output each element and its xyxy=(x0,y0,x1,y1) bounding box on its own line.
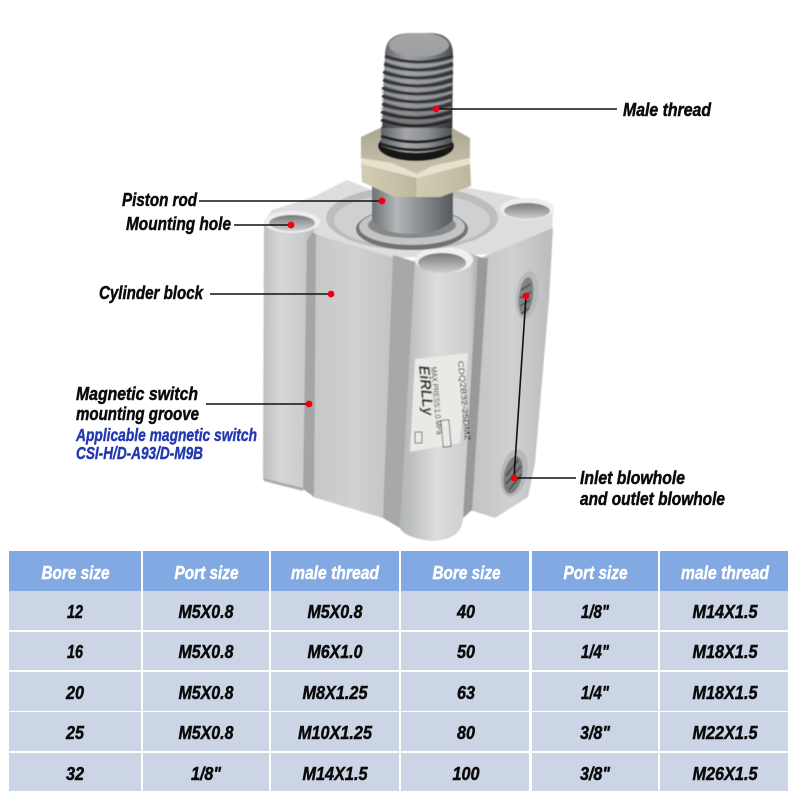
table row: 16 / 50: 16 xyxy=(67,641,84,662)
cylinder top face xyxy=(264,180,553,258)
table row: 16 / 50: M18X1.5 xyxy=(692,641,758,662)
specification table xyxy=(9,551,788,791)
table row: 32 / 100: M26X1.5 xyxy=(692,763,758,784)
callout: piston rod: Piston rod xyxy=(122,189,198,210)
nameplate label xyxy=(410,353,472,452)
table row: 16 / 50: 1/4" xyxy=(581,641,609,662)
table row: 25 / 80: M5X0.8 xyxy=(178,722,234,743)
callout: inlet and outlet blowhole: and outlet blowhole xyxy=(580,488,725,509)
table row: 12 / 40: M14X1.5 xyxy=(692,601,758,622)
table row: 25 / 80: 25 xyxy=(65,722,85,743)
groove left of right tube xyxy=(383,255,416,528)
callout: male thread: Male thread xyxy=(623,99,712,120)
table row: 16 / 50: M6X1.0 xyxy=(308,641,363,662)
inlet port: upper xyxy=(513,270,541,320)
table row: 32 / 100: M14X1.5 xyxy=(302,763,368,784)
table row: 32 / 100 xyxy=(9,753,788,791)
left tube xyxy=(263,214,320,488)
product photo: compact air cylinder xyxy=(263,33,554,541)
table row: 25 / 80: M22X1.5 xyxy=(692,722,758,743)
callout: male thread xyxy=(433,99,712,120)
table row: 16 / 50 xyxy=(9,632,788,670)
nameplate label: EiRLLy xyxy=(415,365,436,417)
table row: 12 / 40: 12 xyxy=(67,601,84,622)
table row: 25 / 80: 80 xyxy=(457,722,476,743)
table row: 20 / 63: M5X0.8 xyxy=(178,682,234,703)
table row: 20 / 63: M8X1.25 xyxy=(302,682,368,703)
applicable magnetic switch note: CSI-H/D-A93/D-M9B xyxy=(76,443,203,463)
callout: magnetic switch mounting groove xyxy=(76,383,312,424)
callout: cylinder block xyxy=(99,282,334,303)
piston seat rings xyxy=(326,186,498,250)
table header row: male thread xyxy=(291,562,380,583)
mounting hole: back right xyxy=(500,198,554,220)
callout: magnetic switch mounting groove: mounting groove xyxy=(76,403,199,424)
main front face xyxy=(313,234,395,518)
groove beside left tube xyxy=(303,228,316,497)
table row: 16 / 50: 50 xyxy=(457,641,476,662)
table row: 32 / 100: 1/8" xyxy=(191,763,221,784)
table row: 32 / 100: 100 xyxy=(452,763,480,784)
callout: inlet and outlet blowhole xyxy=(511,293,725,509)
table row: 20 / 63: 20 xyxy=(65,682,85,703)
table row: 25 / 80: 3/8" xyxy=(580,722,610,743)
male thread xyxy=(381,33,453,157)
table row: 25 / 80 xyxy=(9,712,788,751)
right tube xyxy=(400,249,482,541)
nameplate label: MAX PRESS:1.0 MPa xyxy=(429,366,444,435)
table row: 25 / 80: M10X1.25 xyxy=(298,722,373,743)
table row: 12 / 40: M5X0.8 xyxy=(308,601,363,622)
applicable magnetic switch note: Applicable magnetic switch xyxy=(75,425,257,445)
table row: 12 / 40 xyxy=(9,591,788,630)
table header row: Port size xyxy=(174,562,238,583)
table row: 20 / 63 xyxy=(9,672,788,711)
table header row: male thread xyxy=(681,562,770,583)
callout: inlet and outlet blowhole: Inlet blowhole xyxy=(580,467,685,488)
table header row xyxy=(9,551,788,591)
table row: 32 / 100: 3/8" xyxy=(580,763,610,784)
mounting hole: left xyxy=(264,211,320,233)
piston rod shaft xyxy=(372,185,453,234)
table header row: Bore size xyxy=(42,562,110,583)
applicable magnetic switch note xyxy=(75,425,257,463)
outlet port: lower xyxy=(496,447,532,499)
table row: 16 / 50: M5X0.8 xyxy=(178,641,234,662)
right side face xyxy=(470,228,553,518)
bottom of left tube and main face shading xyxy=(263,478,303,491)
table header row: Bore size xyxy=(432,562,500,583)
table row: 12 / 40: 1/8" xyxy=(581,601,609,622)
table row: 20 / 63: 1/4" xyxy=(581,682,609,703)
callout: mounting hole: Mounting hole xyxy=(126,213,231,234)
callout: piston rod xyxy=(122,189,385,210)
table row: 20 / 63: M18X1.5 xyxy=(692,682,758,703)
table header row: Port size xyxy=(564,562,628,583)
table row: 20 / 63: 63 xyxy=(457,682,476,703)
callout: magnetic switch mounting groove: Magnetic switch xyxy=(76,383,198,404)
table row: 12 / 40: 40 xyxy=(456,601,476,622)
edge shadow of right tube xyxy=(463,258,488,518)
table row: 12 / 40: M5X0.8 xyxy=(178,601,234,622)
table row: 32 / 100: 32 xyxy=(66,763,85,784)
hex nut xyxy=(361,128,471,197)
mounting hole: front xyxy=(415,247,473,273)
callout: cylinder block: Cylinder block xyxy=(99,282,204,303)
nameplate label: CDQ2B32-25DMZ xyxy=(456,360,472,441)
